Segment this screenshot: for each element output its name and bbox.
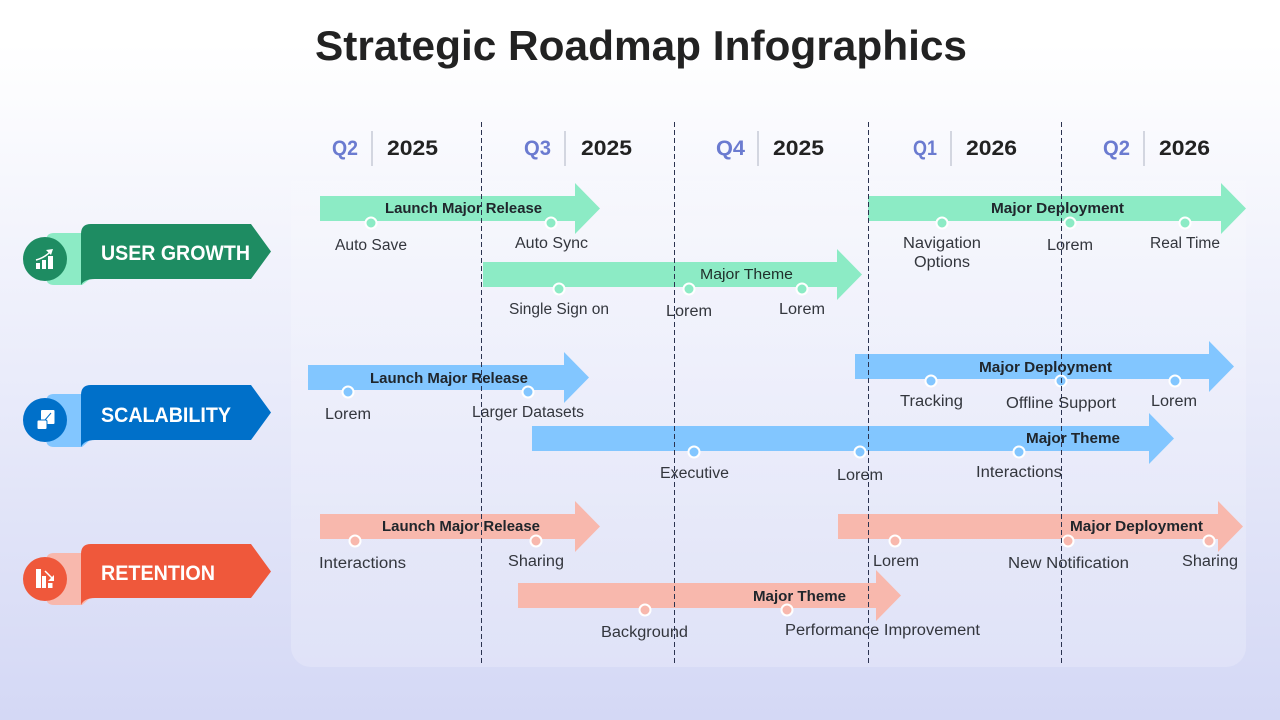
arrow: major theme [518, 570, 901, 621]
arrow: major theme [483, 249, 862, 300]
label: USER GROWTH [101, 242, 250, 265]
milestone labels: Background [601, 624, 688, 641]
arrow: major deployment: Major Deployment [991, 200, 1124, 217]
milestone labels: Offline Support [1006, 395, 1117, 412]
arrow: launch major release [320, 501, 600, 552]
milestone labels [325, 393, 1197, 484]
quarter: Q4 2025 [716, 131, 824, 166]
milestone labels: Single Sign on [509, 301, 609, 318]
arrow: launch major release: Launch Major Release [385, 200, 542, 217]
milestone labels: Interactions [319, 555, 406, 572]
icon: growth chart [36, 249, 53, 269]
arrow: major theme: Major Theme [700, 266, 793, 283]
milestone labels: Sharing [1182, 553, 1238, 570]
quarter: Q3 2025: Q3 [524, 137, 551, 160]
icon: scaling squares [37, 410, 54, 430]
panel: timeline [291, 150, 1246, 667]
title: Strategic Roadmap Infographics [315, 22, 967, 69]
quarter: Q3 2025: 2025 [581, 137, 632, 160]
quarter: Q1 2026: Q1 [913, 137, 937, 160]
category: retention [23, 544, 271, 605]
label: SCALABILITY [101, 404, 231, 427]
quarter: Q2 2025: Q2 [332, 137, 358, 160]
milestone labels: Auto Save [335, 237, 407, 254]
milestone labels: Sharing [508, 553, 564, 570]
milestone labels: Lorem [666, 303, 712, 320]
milestone labels [335, 235, 1220, 320]
category: scalability [23, 385, 271, 447]
milestone labels: Lorem [1047, 237, 1093, 254]
row: user growth arrows [320, 183, 1246, 320]
arrow: launch major release [320, 183, 600, 234]
quarter: Q2 2026 [1103, 131, 1210, 166]
milestones [366, 218, 1190, 294]
arrow: major theme: Major Theme [1026, 430, 1120, 447]
row: retention arrows [319, 501, 1243, 641]
quarter dividers [482, 122, 1062, 666]
arrow: major deployment: Major Deployment [979, 359, 1112, 376]
milestone labels: Navigation [903, 235, 981, 252]
arrow: major deployment [855, 341, 1234, 392]
milestones [350, 536, 1214, 616]
timeline header [332, 131, 1210, 166]
milestone labels [319, 553, 1238, 641]
milestone labels: Lorem [325, 406, 371, 423]
quarter: Q2 2026: Q2 [1103, 137, 1130, 160]
arrow: major theme [532, 413, 1174, 464]
arrow: major theme: Major Theme [753, 588, 846, 605]
milestone labels: Tracking [900, 393, 963, 410]
quarter: Q2 2025 [332, 131, 438, 166]
milestone labels: Lorem [837, 467, 883, 484]
quarter: Q4 2025: Q4 [716, 137, 745, 160]
milestones [342, 376, 1180, 458]
quarter: Q2 2026: 2026 [1159, 137, 1210, 160]
milestone labels: Lorem [873, 553, 919, 570]
milestone labels: Lorem [1151, 393, 1197, 410]
quarter: Q1 2026: 2026 [966, 137, 1017, 160]
arrow: launch major release: Launch Major Release [370, 370, 528, 387]
milestone labels: New Notification [1008, 555, 1129, 572]
milestone labels: Executive [660, 465, 729, 482]
arrow: major deployment [868, 183, 1246, 234]
row: scalability arrows [308, 341, 1234, 484]
arrow: launch major release [308, 352, 589, 403]
milestone labels: Real Time [1150, 235, 1220, 252]
category: user growth [23, 224, 271, 285]
quarter: Q1 2026 [913, 131, 1017, 166]
quarter: Q2 2025: 2025 [387, 137, 438, 160]
icon: declining bars [36, 569, 54, 588]
quarter: Q3 2025 [524, 131, 632, 166]
milestone labels: Options [914, 254, 970, 271]
arrow: major deployment [838, 501, 1243, 552]
label: RETENTION [101, 562, 215, 585]
quarter: Q4 2025: 2025 [773, 137, 824, 160]
arrow: launch major release: Launch Major Release [382, 518, 540, 535]
milestone labels: Interactions [976, 464, 1062, 481]
milestone labels: Performance Improvement [785, 622, 981, 639]
milestone labels: Larger Datasets [472, 404, 584, 421]
milestone labels: Auto Sync [515, 235, 588, 252]
milestone labels: Lorem [779, 301, 825, 318]
arrow: major deployment: Major Deployment [1070, 518, 1203, 535]
